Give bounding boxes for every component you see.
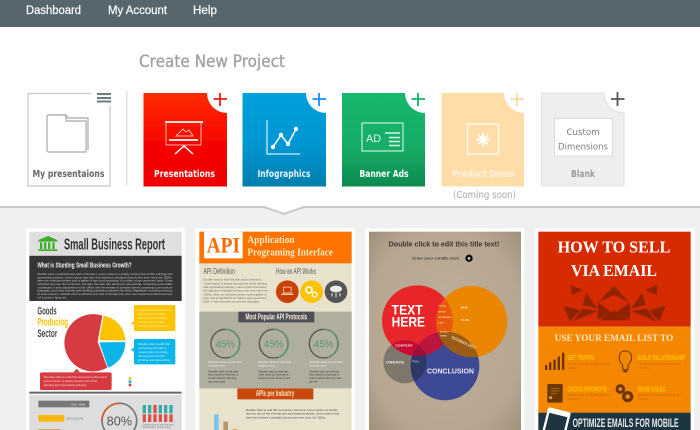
gauge captions <box>208 361 344 383</box>
icon: custom dimensions box <box>554 118 612 156</box>
gallery top edge with notch <box>0 207 700 214</box>
icon: envelopes <box>563 285 666 322</box>
icon: gears <box>300 280 323 303</box>
gauge captions: Lorem ipsum dummy <box>208 377 238 380</box>
item: get traffic: Double click to edit this text and <box>567 362 612 365</box>
card: API <box>195 228 355 430</box>
callout: red: printing and typesetting industry. <box>44 384 88 387</box>
gauge captions: master text <box>208 365 225 368</box>
orange section: USE YOUR EMAIL LIST TO <box>555 334 673 344</box>
sector heading: Goods <box>37 305 57 317</box>
label: Blank: Blank <box>571 169 596 180</box>
callout: yellow: Lorem ipsum is simply <box>137 317 168 320</box>
gauge captions: text and to format it. <box>259 374 290 377</box>
venn labels: ATTRACT <box>440 330 450 333</box>
venn labels <box>386 303 477 375</box>
icon: phone <box>541 407 571 430</box>
gauge captions: Double click to edit this <box>309 370 340 373</box>
industry section: been the industry's standard dummy text ever since the 1500s. <box>246 416 326 419</box>
venn labels: CONCLUSION <box>427 368 474 375</box>
icon: plus <box>412 93 425 106</box>
venn subtitle: Enter your subtitle here <box>412 256 460 261</box>
dark intro block: Double click to edit this text and to format it. Lorem ipsum is simply dummy text of the printing and <box>37 273 173 276</box>
venn labels: INTERESTING <box>438 317 452 319</box>
item: cross promote: to format it. <box>567 398 580 401</box>
label: My presentations: My presentaions <box>32 169 105 180</box>
item: build relationship: Double click to edit this text and <box>638 362 682 365</box>
tile: Banner Ads <box>342 93 425 186</box>
gauge captions: text and to format it. <box>309 374 340 377</box>
sector heading: Sector <box>37 328 57 340</box>
tile: My presentations <box>28 94 111 186</box>
card header <box>29 232 182 255</box>
item: build relationship: to format it. <box>638 366 650 369</box>
top panel background <box>0 0 700 207</box>
industry section: Double click to edit this text and to format it. Lorem ipsum is simply <box>246 409 339 412</box>
navigation bar <box>0 0 700 27</box>
API header: Programing Interface <box>247 248 334 259</box>
dark intro block: of Lorem Ipsum. <box>37 296 68 299</box>
item: cross promote <box>547 384 612 403</box>
dark intro block: when an unknown printer took a galley of type and scrambled it to make a type specimen book. It has <box>37 280 173 283</box>
gauge captions: Double click to edit this <box>259 370 290 373</box>
API header <box>199 232 352 263</box>
tile: Blank <box>542 92 624 186</box>
venn labels: PLAN <box>461 319 469 322</box>
gauge captions: Double click to edit this <box>208 370 239 373</box>
API header: API <box>207 232 240 257</box>
tile: Presentations <box>144 93 227 186</box>
venn title: Double click to edit this title text! <box>389 242 499 249</box>
dark intro block: typesetting industry. Lorem Ipsum has been the industry's standard dummy text ever since the 1500s, <box>37 276 173 279</box>
industry section: dummy text of the printing and typesetting industry. Lorem Ipsum has <box>246 413 340 416</box>
card: How to sell via email <box>535 228 694 430</box>
callout: yellow: text and to format it. <box>137 313 166 316</box>
lower statistics section: 2014: 100% <box>71 402 86 406</box>
gauge captions: Double click to edit this <box>208 361 243 364</box>
callout: red: Lorem ipsum is simply dummy text of the <box>44 380 98 383</box>
lower statistics section: 2013: 10.67% <box>67 417 84 421</box>
gauge captions: Double click to edit this <box>258 361 292 364</box>
gauge captions: Lorem ipsum dummy text <box>259 377 291 380</box>
icon: demo square <box>468 124 498 154</box>
nav: Dashboard: Dashboard <box>26 5 81 17</box>
icon: custom dimensions box: Custom <box>566 128 600 138</box>
venn diagram <box>382 285 507 400</box>
item: make sales: MAKE SALES <box>638 384 665 393</box>
callout: blue: text and to format it. <box>138 347 167 350</box>
API definition: API Definition <box>203 267 235 276</box>
item: cross promote: Double click to edit this text and <box>567 394 612 397</box>
sector heading <box>37 305 68 340</box>
card title: Small Business Report <box>64 236 165 253</box>
gauge captions: text <box>309 380 318 383</box>
people pictogram <box>143 405 173 422</box>
item: make sales <box>617 384 682 401</box>
gauge 1: 45% <box>215 339 235 350</box>
icon: custom dimensions box: Dimensions <box>558 142 608 152</box>
venn labels: TELLME <box>438 306 446 308</box>
item: get traffic: GET TRAFFIC <box>567 353 595 362</box>
API definition: the industry's standard dummy text ever since the <box>203 290 269 293</box>
gauge 2: 45% <box>264 339 284 350</box>
pie legend <box>129 377 131 386</box>
venn labels: HERE <box>392 315 425 330</box>
divider <box>126 91 128 185</box>
item: get traffic: to format it. <box>567 366 580 369</box>
icon: menu <box>97 94 111 102</box>
API definition: Double click to edit this text and to format it. <box>203 279 262 282</box>
icon: projector screen <box>165 122 203 154</box>
callout: red <box>40 369 112 390</box>
icon: bank <box>38 236 57 251</box>
sector heading: Producing <box>37 317 68 329</box>
orange section <box>538 327 691 413</box>
venn labels: LIST <box>438 323 445 325</box>
lower statistics section: and format it. Lorem ipsum <box>143 426 171 429</box>
dark intro block: of Lorem Ipsum. Double click to edit this text and to format it for your own report and add more text <box>37 293 173 296</box>
callout: yellow: printing and typesetting <box>137 325 170 328</box>
lower statistics section: 80% <box>107 414 132 428</box>
venn labels: CONTENT <box>395 343 413 347</box>
icon: ad banner: AD <box>366 133 381 145</box>
gauge captions: dummy text <box>208 380 225 383</box>
gauge captions: master text <box>258 365 275 368</box>
how an API works: How an API Works <box>276 267 316 276</box>
callout: red: Double click to edit this text and to format it. <box>44 376 108 379</box>
API definition: book. It has survived not only five centuries. <box>203 301 260 304</box>
gauge captions: master text <box>309 365 326 368</box>
protocols section <box>199 312 352 388</box>
mobile banner <box>538 407 691 430</box>
gauge 2 <box>259 329 288 358</box>
industry section: APIs per Industry <box>256 389 294 398</box>
venn labels: HERE <box>440 335 447 337</box>
API definition: Lorem ipsum is simply dummy text of the printing <box>203 282 267 285</box>
gallery background <box>0 208 700 430</box>
item: cross promote: CROSS PROMOTE <box>567 384 607 393</box>
item: make sales: Double click to edit this text and <box>638 394 682 397</box>
API definition: type and scrambled it to make a type specimen <box>203 297 267 300</box>
gauge captions: text and to format it. <box>208 374 239 377</box>
gauge 1 <box>211 329 240 358</box>
industry section <box>214 388 340 430</box>
gauge captions: Double click to edit this <box>309 361 344 364</box>
icon: folder <box>47 115 88 152</box>
item: build relationship <box>619 351 685 372</box>
lower statistics section <box>29 392 182 430</box>
nav: Help: Help <box>193 5 217 17</box>
pie chart <box>64 314 125 371</box>
dark intro block <box>29 256 182 301</box>
callout: blue <box>131 339 175 364</box>
lower statistics section: Double click to edit this text <box>143 423 174 426</box>
venn labels: TECHNOLOGY <box>450 335 477 350</box>
tile: Product Demo <box>442 93 524 201</box>
callout: yellow <box>131 305 175 331</box>
label: Presentations: Presentations <box>154 169 215 180</box>
venn labels: NEW <box>461 307 468 310</box>
icon: cloud <box>325 280 347 303</box>
icon: plus <box>214 93 227 106</box>
venn labels: TEXT <box>392 303 423 318</box>
dark intro block: survived not only five centuries, but also the leap into electronic typesetting, remaining essentially <box>37 283 173 286</box>
callout: yellow: dummy text of the <box>137 321 166 324</box>
item: get traffic <box>545 353 612 370</box>
heading: Create New Project: Create New Project <box>139 52 285 71</box>
red banner <box>538 232 691 327</box>
callout: blue: dummy text of the <box>138 355 166 358</box>
dark intro block: unchanged. It was popularised in the 1960s with the release of Letraset sheets containing Lorem Ipsum <box>37 286 172 289</box>
icon: plus <box>510 93 524 106</box>
API definition <box>203 267 269 304</box>
venn subtitle <box>412 255 473 262</box>
card: Small Business Report <box>26 228 185 430</box>
tile: Infographics <box>242 93 326 186</box>
callout: blue: Lorem ipsum is simply <box>138 351 169 354</box>
protocols section: Most Popular API Protocols <box>245 312 307 321</box>
venn labels: CREATE <box>386 361 405 365</box>
API definition: and typesetting industry. Lorem Ipsum has been <box>203 286 267 289</box>
red banner: HOW TO SELL <box>558 238 670 257</box>
dark intro block: passages, and more recently with desktop publishing software like Aldus PageMaker including versions <box>37 290 173 293</box>
icon: plus <box>312 93 326 106</box>
red banner: VIA EMAIL <box>571 261 657 280</box>
venn labels: FULL <box>412 361 420 363</box>
icon: line chart <box>267 120 300 154</box>
icon: laptop <box>276 280 299 303</box>
card: Venn diagram <box>365 228 524 430</box>
donut 80% <box>102 403 137 430</box>
icon: plus <box>611 92 624 106</box>
dark intro block: What is Stunting Small Business Growth? <box>37 262 132 269</box>
gauge captions: Lorem ipsum dummy text <box>309 377 341 380</box>
callout: yellow: Double click to edit this <box>137 309 172 312</box>
label: Banner Ads: Banner Ads <box>360 169 409 180</box>
label: Infographics: Infographics <box>258 169 311 180</box>
API header: Application <box>247 235 295 246</box>
venn labels: WITH AN <box>438 310 446 313</box>
how an API works <box>276 267 347 303</box>
callout: blue: printing and typesetting <box>138 359 171 362</box>
gauge 3 <box>309 329 338 358</box>
nav: My Account: My Account <box>108 5 168 17</box>
label: Product Demo: Product Demo <box>452 169 515 180</box>
callout: blue: Double click to edit this <box>138 343 171 346</box>
gauge 3: 45% <box>314 339 334 350</box>
API definition: 1500s, when an unknown printer took a galley of <box>203 293 267 296</box>
item: make sales: to format it. <box>638 398 650 401</box>
label: Coming soon: (Coming soon) <box>453 190 516 201</box>
